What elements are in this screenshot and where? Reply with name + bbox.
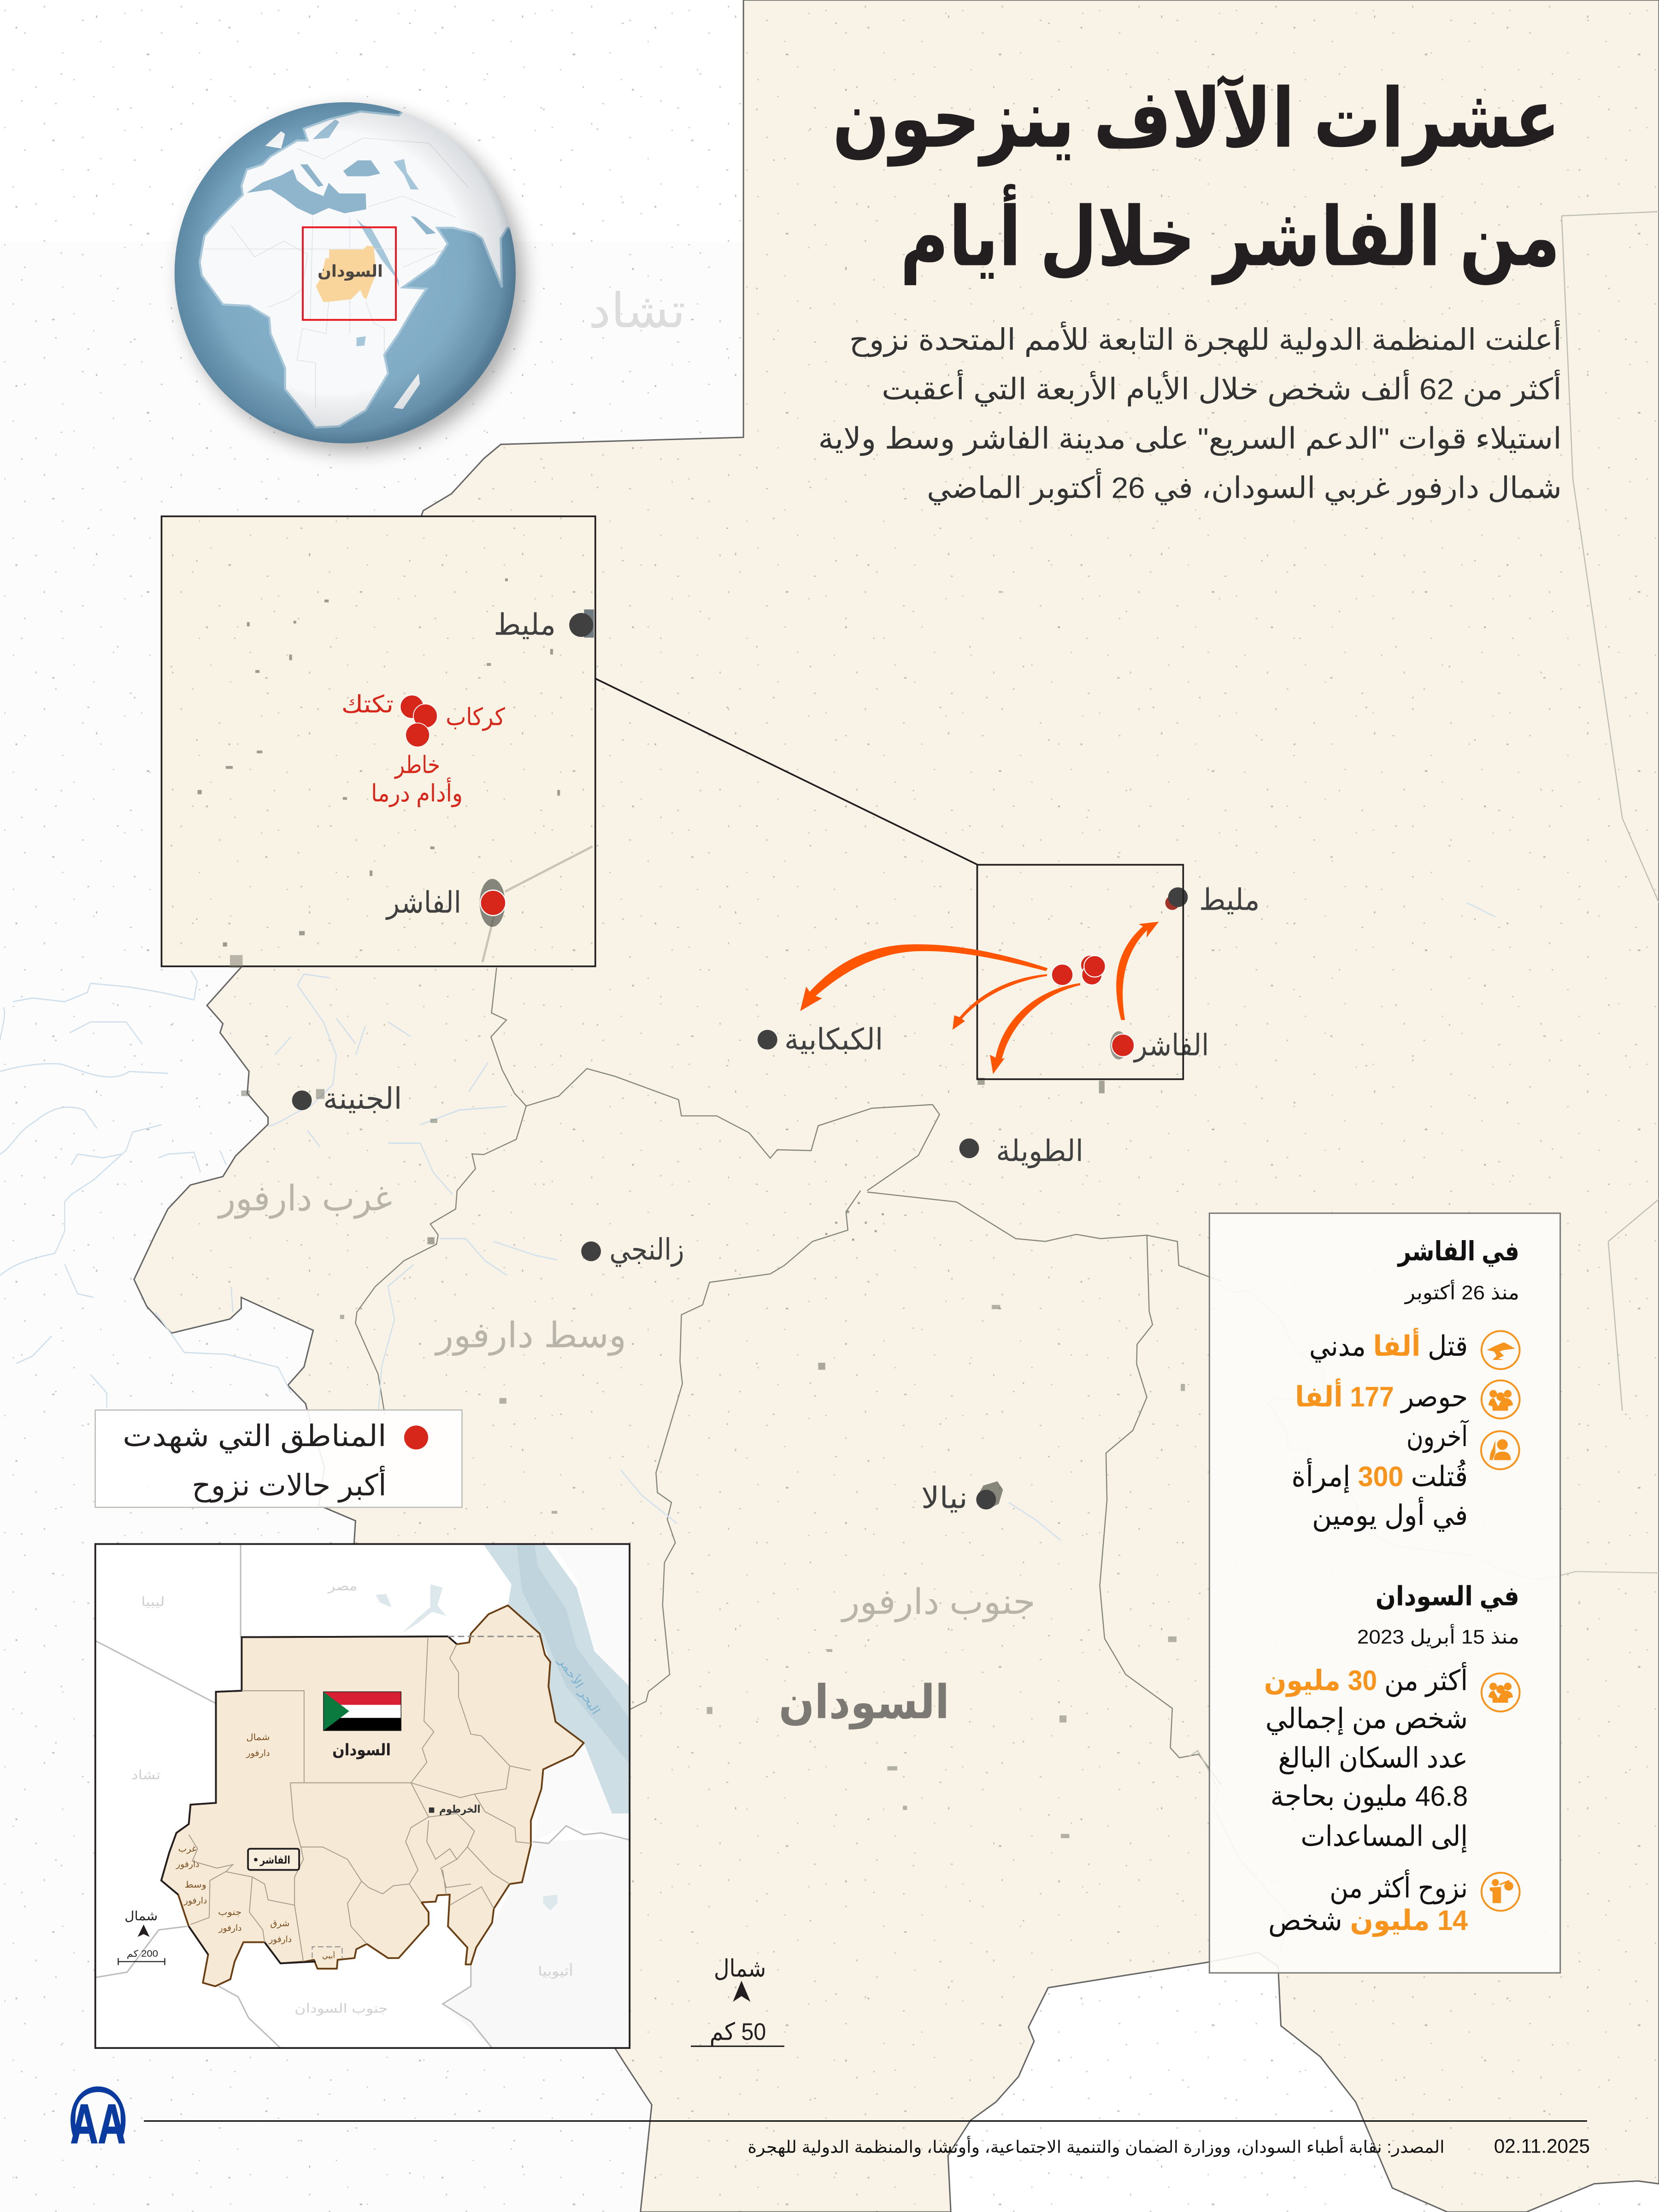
red village labels: خاطر [394,752,440,779]
red village labels: تكتك [341,691,394,718]
red village labels [341,691,505,807]
neighbouring borders [95,1544,629,2048]
stat: besieged: حوصر 177 ألفا [1295,1378,1468,1413]
state name labels: دارفور [246,1748,270,1758]
title [832,72,1560,286]
state name labels: وسط [184,1880,206,1890]
state labels: جنوب دارفور [840,1583,1035,1623]
inset frame [95,1544,629,2048]
legend: most displaced areas [95,1410,462,1507]
cities on main map: الجنينة [323,1082,402,1115]
north arrow and scale: 200 كم [127,1949,158,1959]
label: Sudan on globe: السودان [318,262,383,281]
cities on main map [292,883,1260,1514]
red village labels: وأدام درما [371,777,463,807]
neighbouring country labels [131,1579,573,2016]
intro paragraph: أكثر من 62 ألف شخص خلال الأيام الأربعة التي أعقبت [882,369,1562,406]
El Fasher callout: الفاشر [259,1854,290,1866]
intro paragraph: أعلنت المنظمة الدولية للهجرة التابعة للأمم المتحدة نزوح [849,320,1562,357]
intro paragraph [818,320,1562,506]
state name labels: دارفور [218,1924,241,1933]
neighbouring country labels: تشاد [131,1768,160,1782]
state name labels: شرق [270,1919,289,1929]
scattered settlements in inset [198,578,560,968]
icon: group [1482,1380,1520,1418]
city: El Fasher [385,886,506,920]
stat: population text: إلى المساعدات [1300,1821,1468,1853]
footer [71,2087,1590,2157]
panel: statistics [1209,1213,1560,1973]
globe locator [175,95,535,452]
red displacement points on main map [1052,955,1134,1057]
city: Mellit [494,608,594,641]
red locator square [303,227,396,320]
AA logo [71,2087,125,2155]
source: المصدر: نقابة أطباء السودان، ووزارة الضمان والتنمية الاجتماعية، وأوتشا، والمنظمة الدولية للهجرة [747,2136,1445,2157]
stat: population text [1265,1703,1468,1853]
cities on main map: نيالا [921,1481,968,1514]
map: rivers [0,971,507,1415]
state name labels: شمال [246,1733,270,1742]
intro paragraph: استيلاء قوات "الدعم السريع" على مدينة الفاشر وسط ولاية [818,422,1562,456]
subheading: since 15 April 2023: منذ 15 أبريل 2023 [1357,1624,1519,1648]
neighbouring country labels: ليبيا [141,1594,165,1609]
neighbouring country labels: جنوب السودان [294,2001,388,2016]
red village labels: كركاب [446,704,505,731]
state name labels: أبيي [322,1951,335,1960]
El Fasher callout [248,1849,299,1870]
Red Sea central band [517,1544,629,1764]
cities on main map: زالنجي [609,1233,684,1267]
Sudan on globe [316,246,376,302]
subheading: since 26 October: منذ 26 أكتوبر [1404,1279,1519,1304]
footer rule [144,2121,1587,2122]
stat: displaced: نزوح أكثر من [1330,1869,1468,1904]
country label: Chad: تشاد [588,284,686,338]
state name labels: دارفور [176,1860,200,1870]
stat: population text: شخص من إجمالي [1265,1703,1468,1735]
icon: displaced person [1482,1873,1520,1911]
state labels: غرب دارفور [217,1179,392,1219]
Abyei dashed box [312,1947,342,1958]
stat: 30 million: أكثر من 30 مليون [1264,1662,1468,1697]
stat: first two days: في أول يومين [1312,1497,1468,1532]
north arrow and scale [118,1909,165,1965]
map: state boundaries [355,212,1659,1953]
red village points [400,695,437,747]
stat: population text: 46.8 مليون بحاجة [1271,1780,1468,1812]
inset: zoomed area [162,516,595,968]
stat: killed: قتل ألفا مدني [1309,1328,1468,1363]
north arrow and scale on main map: شمال [714,1955,766,1982]
state name labels: دارفور [183,1896,207,1906]
cities on main map: الكبكابية [784,1023,883,1056]
icon: body [1482,1331,1520,1369]
heading: in Sudan: في السودان [1376,1582,1519,1612]
Lake Nasser [376,1584,446,1633]
stat: population text: عدد السكان البالغ [1278,1742,1468,1775]
state borders [189,1638,531,1962]
country label: Sudan: السودان [779,1677,949,1730]
state name labels: جنوب [218,1908,241,1918]
state labels: وسط دارفور [434,1316,626,1356]
Sudan north and west border [161,1636,457,1963]
neighbouring country labels: مصر [327,1579,357,1594]
legend: most displaced areas: المناطق التي شهدت [123,1419,387,1453]
globe lighting [175,102,516,443]
heading: in El Fasher: في الفاشر [1397,1236,1519,1267]
label: Sudan: السودان [332,1741,391,1759]
Red Sea [483,1544,629,1813]
Lake Tana [543,1894,557,1911]
legend: most displaced areas: أكبر حالات نزوح [192,1465,387,1503]
map: settlement clusters [226,949,1185,1838]
globe shadow [182,110,524,452]
icon: group [1482,1673,1520,1712]
road and El Fasher urban area [482,847,593,962]
connector from zoom box to inset [595,678,977,865]
state name labels [176,1733,335,1960]
zoom box on main map [977,865,1183,1079]
cities on main map: مليط [1199,883,1260,916]
stat: others: آخرون [1406,1419,1469,1453]
flag of Sudan [324,1692,401,1730]
date: 02.11.2025 [1494,2135,1590,2157]
cities on main map: الطويلة [996,1134,1083,1168]
icon: woman [1481,1431,1519,1469]
north arrow and scale on main map [691,1955,784,2046]
inset: Sudan overview map [95,1544,629,2048]
map: Nyala river and wadis [494,903,1495,1541]
state name labels: غرب [178,1844,196,1854]
displacement arrows [800,922,1159,1074]
Ethiopia terrain [443,1838,629,2048]
city: Mellit: مليط [494,608,556,641]
state labels [217,1179,1035,1623]
north arrow and scale: شمال [124,1909,158,1923]
globe sphere [175,95,535,443]
north arrow and scale on main map: 50 كم [710,2019,766,2046]
Sudan shape [161,1606,584,1986]
state name labels: دارفور [268,1935,292,1945]
Khartoum: الخرطوم [439,1803,481,1816]
neighbouring country labels: أثيوبيا [538,1963,573,1979]
stat: women killed: قُتلت 300 إمرأة [1292,1458,1468,1494]
intro paragraph: شمال دارفور غربي السودان، في 26 أكتوبر الماضي [927,468,1562,506]
Red Sea label: البحر الأحمر [555,1653,604,1717]
Halaib dashed line [448,1635,540,1637]
stat: 14 million: 14 مليون شخص [1268,1905,1468,1937]
city: El Fasher: الفاشر [385,886,461,920]
cities on main map: الفاشر [1133,1029,1209,1063]
AA logo: AA [71,2094,125,2155]
